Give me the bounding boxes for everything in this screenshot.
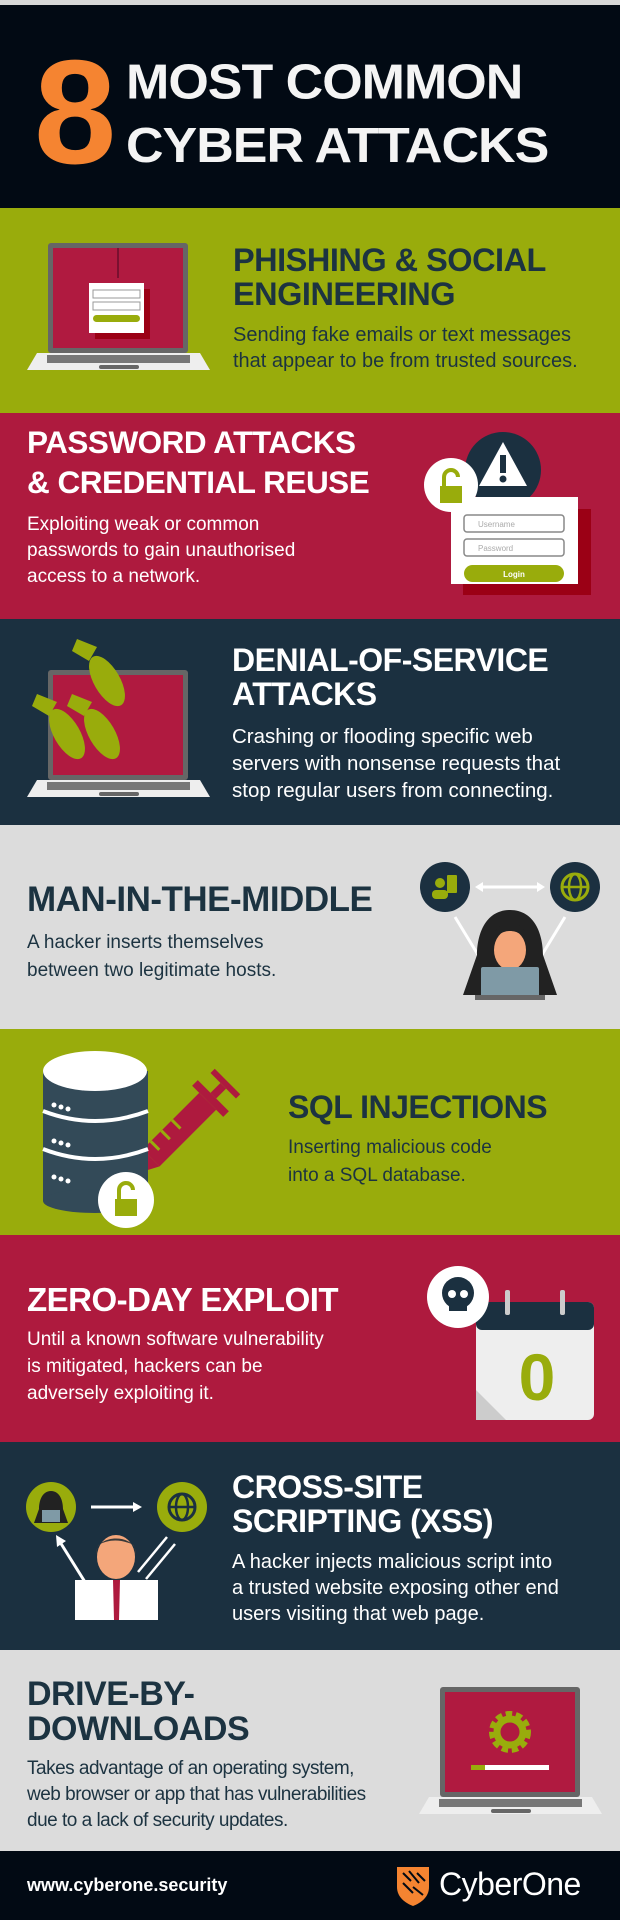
text block: access to a network. [27, 566, 200, 587]
big number 8: 8 [34, 30, 116, 195]
heading: DRIVE-BY- [27, 1675, 194, 1713]
heading [27, 1675, 249, 1748]
heading [232, 1469, 493, 1539]
text block [232, 725, 560, 802]
text block: Takes advantage of an operating system, [27, 1758, 354, 1779]
heading: & CREDENTIAL REUSE [27, 464, 369, 500]
panel: denial of service [0, 619, 620, 825]
heading: ATTACKS [232, 676, 377, 712]
text block [27, 514, 295, 587]
heading: PASSWORD ATTACKS [27, 424, 356, 460]
text block: web browser or app that has vulnerabilities [27, 1784, 366, 1805]
icon: login form with warning: Password [478, 544, 513, 553]
heading: CROSS-SITE [232, 1469, 423, 1505]
title [126, 55, 548, 174]
website url: www.cyberone.security [27, 1875, 227, 1895]
brand name: CyberOne [439, 1866, 581, 1902]
icon: hacker, website and user [26, 1482, 207, 1620]
text block [288, 1137, 492, 1186]
text block: A hacker inserts themselves [27, 932, 264, 953]
icon: hacker between hosts [420, 862, 600, 1000]
text block: due to a lack of security updates. [27, 1810, 288, 1831]
footer [0, 1851, 620, 1920]
icon: laptop with gear [419, 1687, 602, 1814]
text block: that appear to be from trusted sources. [233, 350, 578, 372]
panel: password attacks [0, 413, 620, 619]
title: CYBER ATTACKS [126, 118, 548, 174]
icon: login form with warning: Username [478, 520, 515, 529]
text block: adversely exploiting it. [27, 1383, 214, 1404]
panel: cross-site scripting [0, 1442, 620, 1650]
heading: PHISHING & SOCIAL [233, 242, 546, 278]
panel: phishing [0, 208, 620, 413]
text block: Exploiting weak or common [27, 514, 259, 535]
text block: a trusted website exposing other end [232, 1577, 559, 1599]
icon: login form with warning: Login [503, 570, 525, 579]
text block: Until a known software vulnerability [27, 1329, 324, 1350]
text block [27, 932, 276, 981]
text block: Inserting malicious code [288, 1137, 492, 1158]
heading [233, 242, 546, 312]
text block [233, 324, 578, 372]
icon: database with syringe [42, 1051, 240, 1228]
panel: drive-by downloads [0, 1650, 620, 1851]
text block: stop regular users from connecting. [232, 779, 553, 802]
panel: zero-day exploit [0, 1235, 620, 1442]
text block: A hacker injects malicious script into [232, 1551, 552, 1573]
heading: MAN-IN-THE-MIDDLE [27, 880, 372, 919]
text block: is mitigated, hackers can be [27, 1356, 263, 1377]
heading: SCRIPTING (XSS) [232, 1503, 493, 1539]
text block: passwords to gain unauthorised [27, 540, 295, 561]
text block: Crashing or flooding specific web [232, 725, 533, 748]
heading: DOWNLOADS [27, 1710, 249, 1748]
text block: Sending fake emails or text messages [233, 324, 571, 346]
icon: laptop with bombs [27, 639, 210, 797]
heading [232, 642, 548, 712]
heading: ENGINEERING [233, 276, 455, 312]
text block: servers with nonsense requests that [232, 752, 560, 775]
text block [27, 1329, 324, 1404]
title: MOST COMMON [126, 55, 522, 110]
icon: login form with warning [424, 432, 591, 595]
text block [232, 1551, 559, 1625]
text block [27, 1758, 366, 1831]
text block: users visiting that web page. [232, 1603, 484, 1625]
icon: shield logo [397, 1867, 429, 1906]
text block: between two legitimate hosts. [27, 960, 276, 981]
icon: calendar with skull: 0 [519, 1340, 555, 1414]
text block: into a SQL database. [288, 1165, 466, 1186]
heading: ZERO-DAY EXPLOIT [27, 1281, 338, 1318]
icon: laptop with phishing hook [27, 243, 210, 370]
heading [27, 424, 369, 500]
panel: sql injections [0, 1029, 620, 1235]
icon: calendar with skull [427, 1266, 594, 1420]
panel: man in the middle [0, 825, 620, 1029]
heading: DENIAL-OF-SERVICE [232, 642, 548, 678]
header panel [0, 0, 620, 208]
heading: SQL INJECTIONS [288, 1089, 547, 1125]
